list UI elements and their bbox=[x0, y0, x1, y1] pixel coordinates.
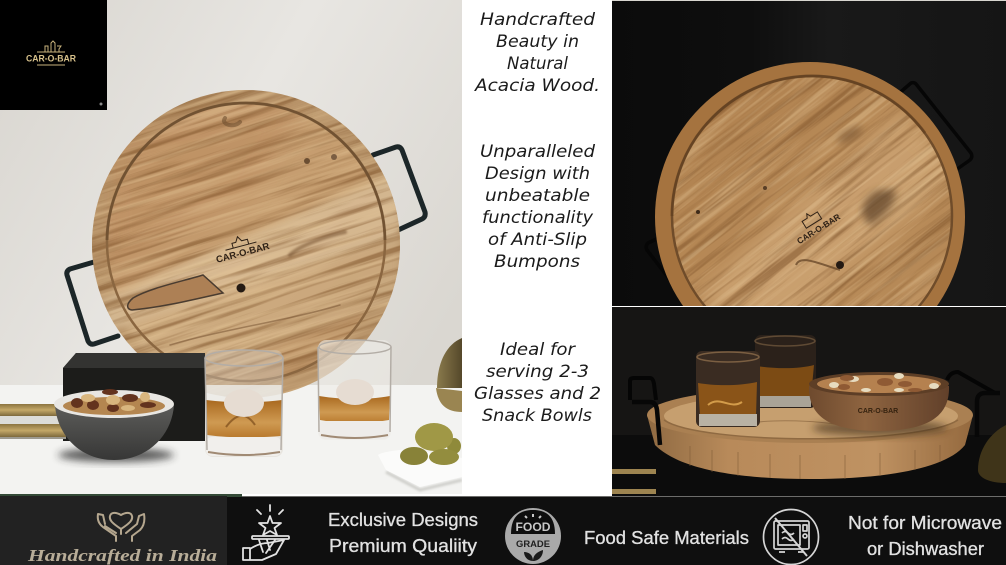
text block: serving capacity bbox=[474, 340, 601, 426]
icon: hand with star on tray bbox=[243, 505, 289, 560]
text block: design and bumpons: Unparalleled bbox=[480, 142, 595, 162]
icon: food grade badge bbox=[505, 508, 561, 564]
logo emblem bbox=[37, 41, 65, 65]
bowl logo: CAR-O-BAR bbox=[858, 408, 898, 415]
text block: design and bumpons: functionality bbox=[482, 208, 594, 228]
icon: food grade badge: FOOD bbox=[516, 522, 550, 534]
text: food safe materials: Food Safe Materials bbox=[584, 528, 749, 548]
icon: food grade badge: GRADE bbox=[516, 539, 550, 550]
text block: handcrafted beauty: Handcrafted bbox=[480, 10, 595, 30]
text block: serving capacity: Snack Bowls bbox=[482, 406, 592, 426]
text block: handcrafted beauty: Beauty in bbox=[496, 32, 579, 52]
black box bbox=[63, 353, 205, 441]
dish of olives bbox=[378, 423, 462, 490]
brass dome bbox=[436, 338, 462, 412]
whisky glass back, side view bbox=[755, 335, 816, 408]
text block: serving capacity: Glasses and 2 bbox=[474, 384, 601, 404]
round tray, side view bbox=[647, 387, 973, 479]
icon: hands holding heart bbox=[98, 513, 144, 541]
text block: design and bumpons: Bumpons bbox=[494, 252, 580, 272]
text block: design and bumpons: unbeatable bbox=[485, 186, 590, 206]
text block: handcrafted beauty: Acacia Wood. bbox=[474, 76, 600, 96]
text block: handcrafted beauty: Natural bbox=[507, 54, 568, 74]
wooden snack bowl bbox=[809, 372, 949, 436]
bowl of nuts bbox=[54, 389, 174, 462]
text block: handcrafted beauty bbox=[474, 10, 600, 96]
whisky glass front, side view bbox=[696, 351, 760, 427]
tray handle front pieces bbox=[632, 393, 1000, 445]
photo: tray side view with glasses and snack bowl bbox=[612, 307, 1006, 496]
text block: serving capacity: serving 2-3 bbox=[486, 362, 589, 382]
whisky glass back bbox=[318, 340, 391, 440]
brass rods bbox=[0, 404, 66, 439]
logo wordmark: CAR-O-BAR bbox=[26, 54, 76, 64]
panel: white text column bbox=[462, 0, 612, 497]
text block: design and bumpons bbox=[480, 142, 595, 272]
whisky glass front bbox=[205, 350, 283, 457]
text: not for microwave or dishwasher: or Dishwasher bbox=[867, 539, 984, 559]
text block: design and bumpons: Design with bbox=[485, 164, 590, 184]
brass bell bbox=[978, 425, 1006, 483]
text: not for microwave or dishwasher: Not for Microwave bbox=[848, 513, 1002, 533]
text: exclusive designs premium quality: Premium Qualiity bbox=[329, 536, 477, 556]
logo panel bbox=[0, 0, 107, 110]
text: not for microwave or dishwasher bbox=[848, 513, 1002, 559]
tray engraved logo bbox=[216, 236, 270, 262]
text block: design and bumpons: of Anti-Slip bbox=[488, 230, 587, 250]
panel: handcrafted in india bbox=[0, 496, 227, 565]
text: exclusive designs premium quality: Exclusive Designs bbox=[328, 510, 478, 530]
icon: no microwave bbox=[764, 510, 818, 564]
tray handle back pieces bbox=[630, 372, 995, 400]
photo: tray with whisky glasses on white table bbox=[0, 0, 498, 496]
tray engraved logo: CAR-O-BAR bbox=[215, 241, 271, 266]
tray handles, left photo bbox=[67, 147, 425, 344]
panel: bottom feature band bbox=[0, 494, 1006, 565]
tray handles, top view bbox=[900, 81, 974, 170]
photo: tray top view on dark background bbox=[612, 0, 1006, 306]
round acacia tray, top view bbox=[655, 62, 965, 306]
round acacia tray, left photo bbox=[92, 90, 400, 397]
tray engraved logo, top view: CAR-O-BAR bbox=[795, 212, 842, 246]
brass rods, dark photo bbox=[612, 469, 656, 494]
text: exclusive designs premium quality bbox=[328, 510, 478, 556]
text block: serving capacity: Ideal for bbox=[500, 340, 576, 360]
label: handcrafted in india: Handcrafted in India bbox=[27, 546, 218, 565]
